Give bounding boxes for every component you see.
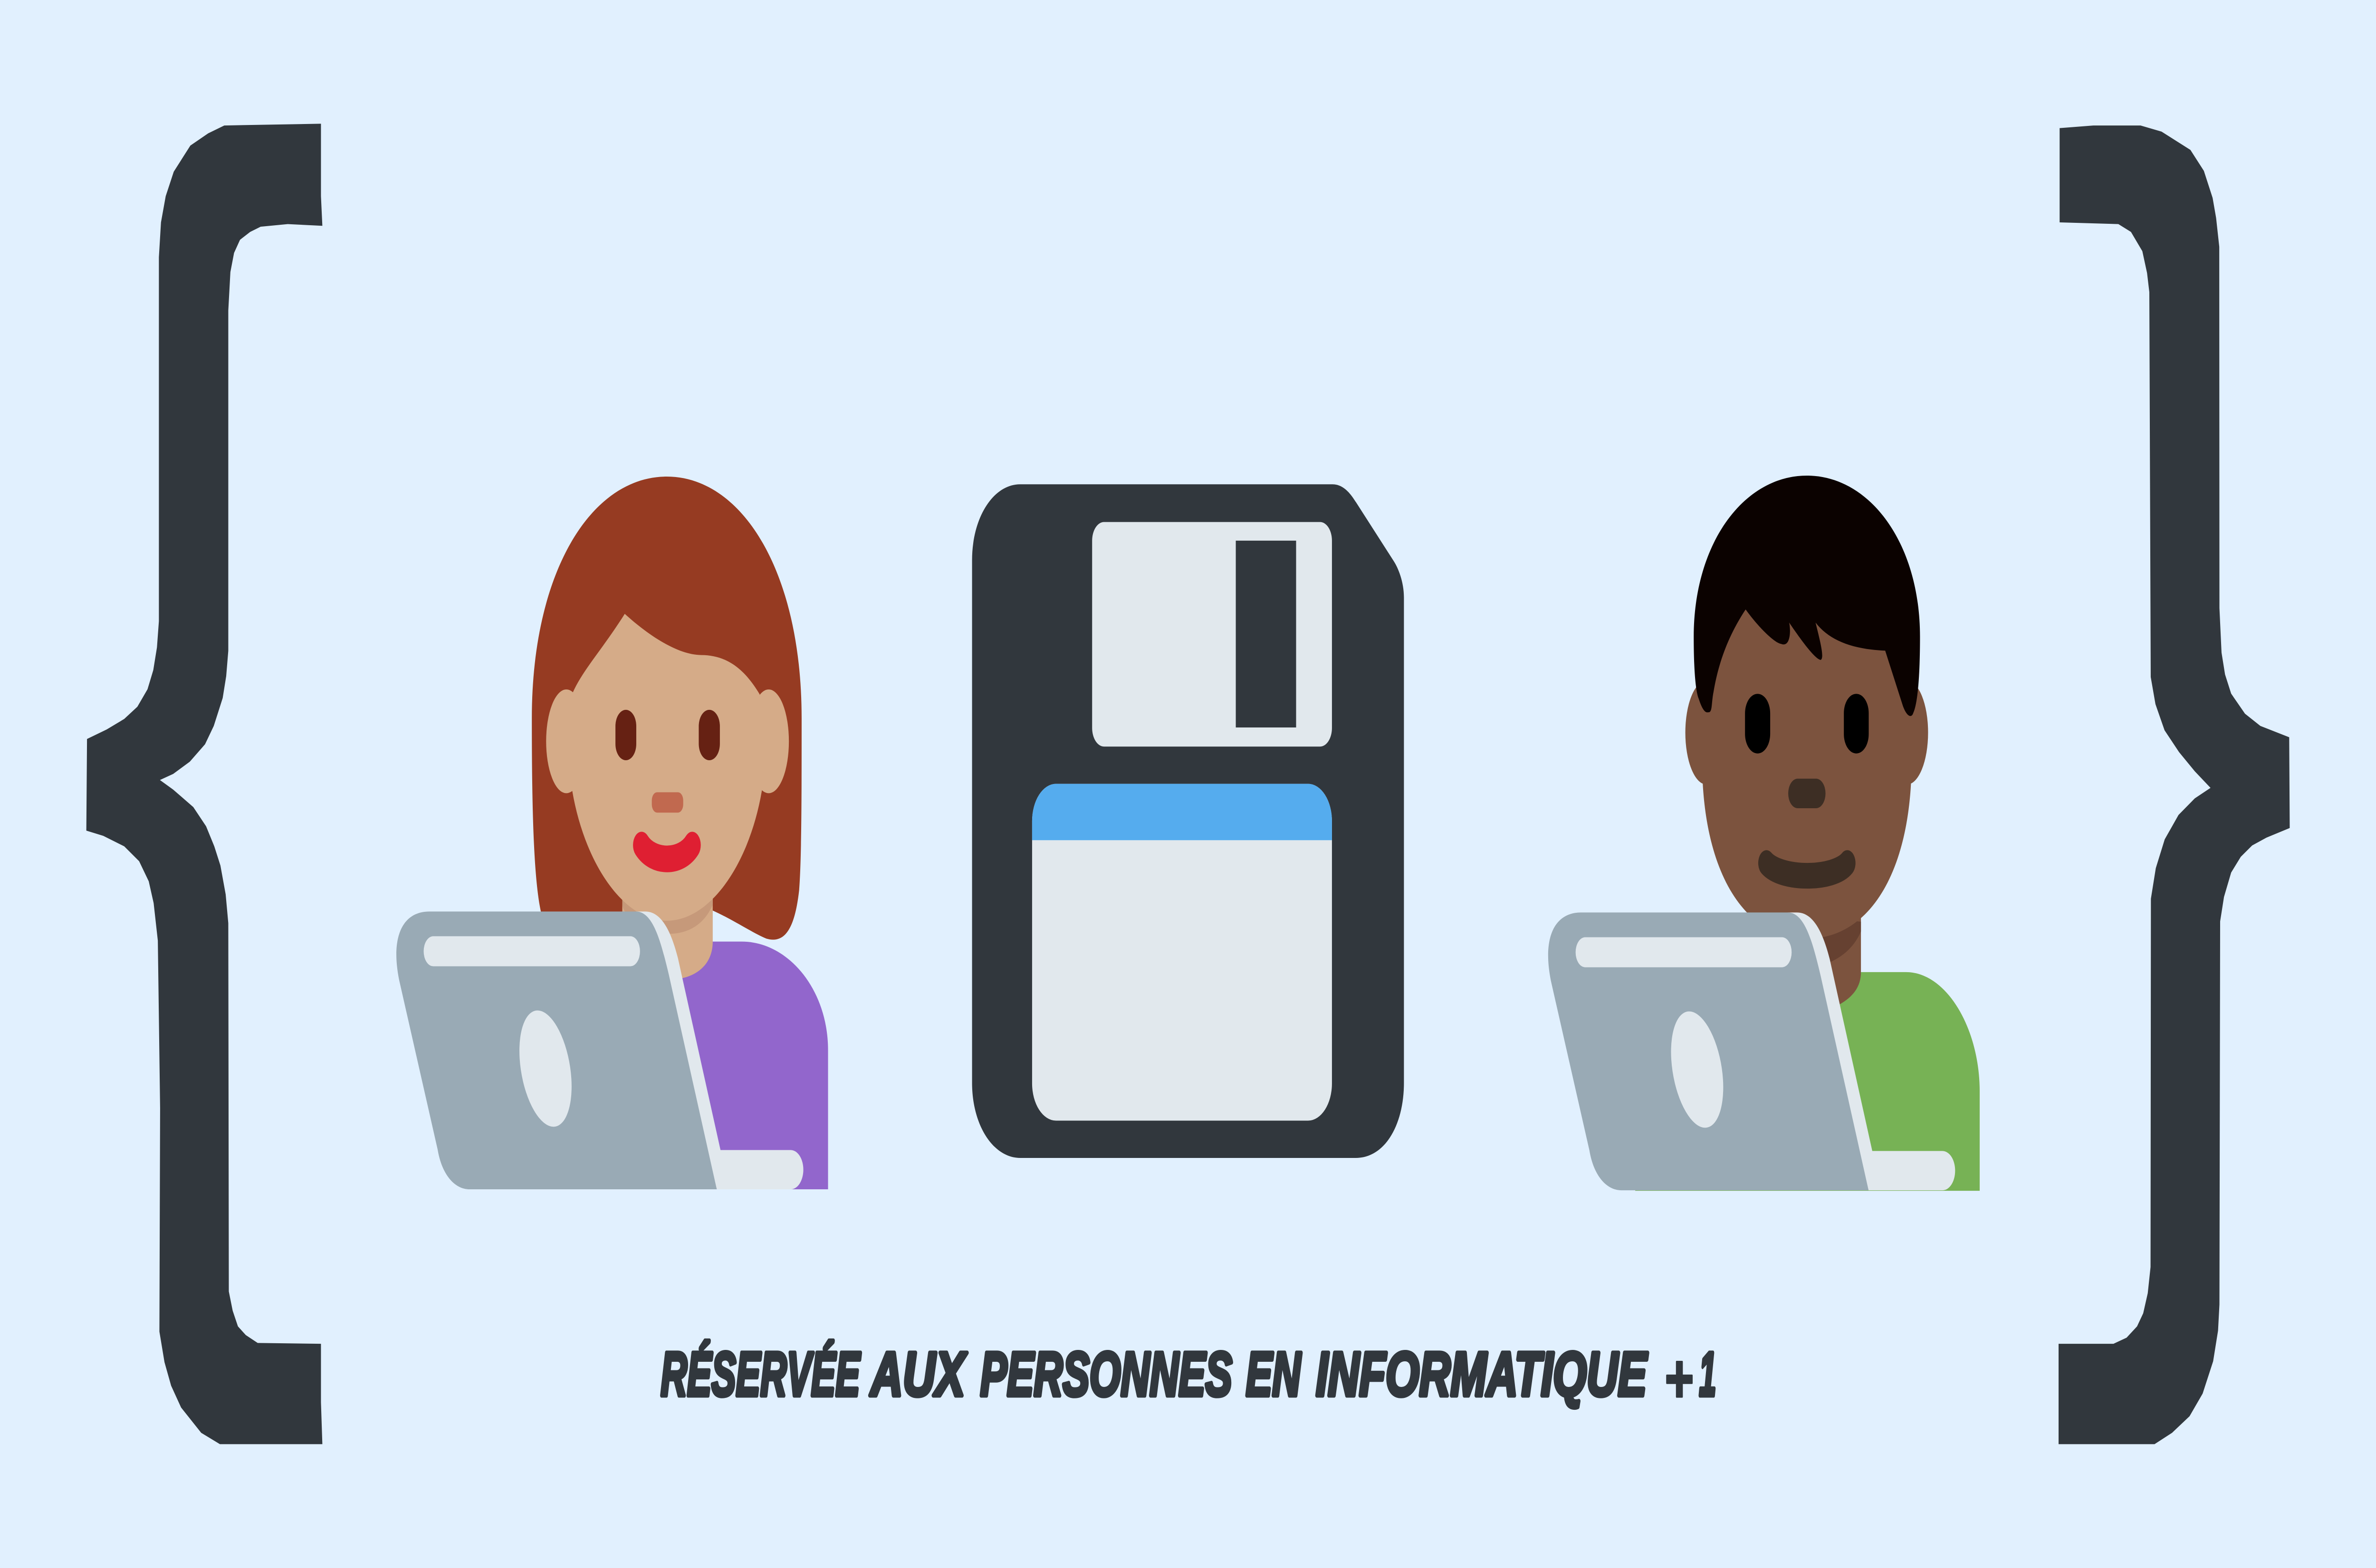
laptop bar [424,936,640,966]
right eye [699,710,720,760]
laptop logo [1661,1000,1733,1139]
caption: PERSONNES [980,1339,1232,1409]
left ear [1686,681,1728,784]
green shirt [1635,972,1980,1191]
icon: right curly brace [2059,125,2290,1444]
hair [532,477,802,940]
shutter window [1236,541,1296,727]
caption: RÉSERVÉE [661,1339,861,1409]
icon: floppy disk [972,484,1404,1158]
face [572,614,762,921]
laptop logo [510,999,581,1138]
disk body [972,484,1404,1158]
icon: man technologist [1548,476,1980,1191]
paper label [1032,784,1332,1121]
right ear [748,689,789,793]
right eye [1844,694,1868,754]
laptop lid [396,911,717,1189]
laptop keyboard base [1788,912,1955,1190]
blue label band [1032,784,1332,840]
caption: + [1664,1340,1693,1417]
neck [623,898,713,980]
mouth [642,845,692,859]
caption: INFORMATIQUE [1316,1339,1648,1409]
neck [1753,912,1861,1004]
left eye [615,710,636,760]
caption: EN [1246,1339,1302,1409]
face [1703,597,1911,939]
icon: left curly brace [86,124,322,1444]
caption: 1 [1699,1339,1716,1409]
hair [1694,476,1920,716]
mouth [1766,863,1847,876]
purple shirt [508,942,828,1189]
laptop lid [1548,912,1868,1190]
left ear [546,689,586,793]
laptop bar [1576,937,1792,967]
neck shadow [1803,917,1861,966]
neck shadow [623,900,713,934]
laptop keyboard base [636,911,804,1189]
nose [652,792,683,813]
nose [1788,779,1826,808]
caption: AUX [869,1339,968,1409]
icon: woman technologist [396,477,828,1189]
metal shutter [1092,522,1332,746]
caption [661,1339,1716,1417]
right ear [1886,681,1928,784]
left eye [1745,694,1770,754]
